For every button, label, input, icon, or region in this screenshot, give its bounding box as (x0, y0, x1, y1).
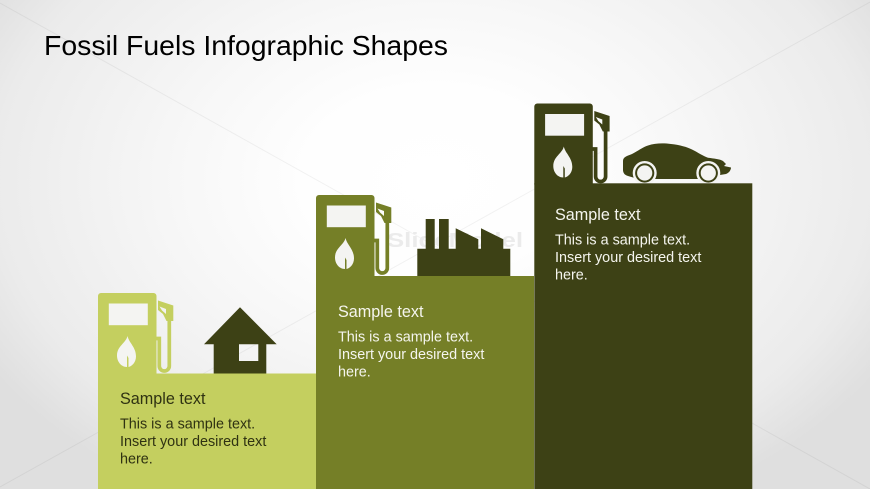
step 2 base (316, 276, 534, 489)
step 1 text: Sample text (120, 390, 206, 408)
panel: step 2 factory (316, 195, 534, 489)
icon: house (204, 307, 277, 374)
step 2 text: Insert your desired text (338, 347, 484, 363)
step 2 text (338, 303, 484, 380)
step 3 text: Insert your desired text (555, 250, 701, 266)
step 1 text: This is a sample text. (120, 416, 255, 432)
step 1 base (98, 374, 316, 489)
step 2 text: Sample text (338, 303, 424, 321)
panel: step 3 car (534, 104, 752, 489)
step 3 text: Sample text (555, 206, 641, 224)
step 3 base (534, 183, 752, 489)
step 3 text (555, 206, 701, 283)
step 1 text: here. (120, 451, 153, 467)
panel: step 1 home (98, 293, 316, 489)
watermark: SlideModel (387, 230, 523, 252)
title: Fossil Fuels Infographic Shapes (44, 30, 448, 61)
icon: fuel pump 3 (534, 104, 610, 184)
icon: fuel pump 2 (316, 195, 391, 276)
step 1 text: Insert your desired text (120, 434, 266, 450)
step 3 text: This is a sample text. (555, 232, 690, 248)
step 2 text: here. (338, 364, 371, 380)
icon: car (623, 143, 731, 185)
step 2 text: This is a sample text. (338, 329, 473, 345)
step 3 text: here. (555, 267, 588, 283)
icon: factory (417, 219, 510, 276)
icon: fuel pump 1 (98, 293, 173, 374)
step 1 text (120, 390, 266, 467)
